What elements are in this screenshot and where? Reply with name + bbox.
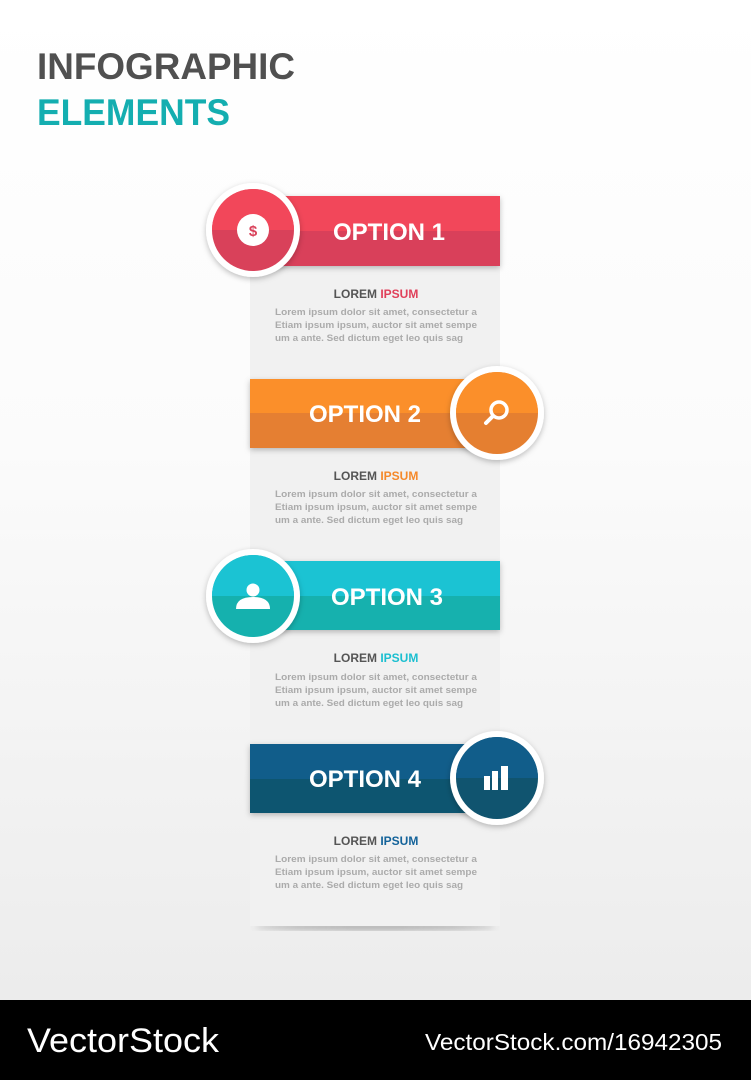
option 4: OPTION 4 bbox=[309, 766, 422, 793]
option 1 bbox=[206, 183, 500, 343]
option 2: OPTION 2 bbox=[309, 401, 421, 428]
text block 1: um a ante. Sed dictum eget leo quis sag bbox=[275, 333, 463, 343]
title bbox=[37, 46, 295, 133]
text block 2: Lorem ipsum dolor sit amet, consectetur a bbox=[275, 489, 478, 499]
option 3: OPTION 3 bbox=[331, 584, 443, 611]
panel: column background bbox=[250, 196, 500, 930]
text block 4: um a ante. Sed dictum eget leo quis sag bbox=[275, 880, 463, 890]
title: INFOGRAPHIC bbox=[37, 46, 295, 87]
text block 3: LOREM IPSUM bbox=[334, 651, 418, 665]
footer: VectorStock bbox=[27, 1022, 220, 1060]
text block 2: Etiam ipsum ipsum, auctor sit amet sempe bbox=[275, 502, 477, 512]
title: ELEMENTS bbox=[37, 92, 230, 133]
option 4 bbox=[250, 731, 544, 890]
icon: bar chart bbox=[450, 731, 544, 825]
icon: magnifier bbox=[450, 366, 544, 460]
text block 2: um a ante. Sed dictum eget leo quis sag bbox=[275, 515, 463, 525]
text block 4: Etiam ipsum ipsum, auctor sit amet sempe bbox=[275, 867, 477, 877]
text block 1: Etiam ipsum ipsum, auctor sit amet sempe bbox=[275, 320, 477, 330]
text block 2 bbox=[275, 469, 478, 525]
text block 1 bbox=[275, 287, 478, 343]
option 3 bbox=[206, 549, 500, 708]
text block 3: um a ante. Sed dictum eget leo quis sag bbox=[275, 698, 463, 708]
text block 3 bbox=[275, 651, 478, 708]
text block 1: LOREM IPSUM bbox=[334, 287, 418, 301]
text block 4: Lorem ipsum dolor sit amet, consectetur a bbox=[275, 854, 478, 864]
text block 3: Etiam ipsum ipsum, auctor sit amet sempe bbox=[275, 685, 477, 695]
text block 3: Lorem ipsum dolor sit amet, consectetur a bbox=[275, 672, 478, 682]
icon: person bbox=[206, 549, 300, 643]
footer bbox=[0, 1000, 751, 1080]
option 1: OPTION 1 bbox=[333, 219, 445, 246]
text block 2: LOREM IPSUM bbox=[334, 469, 418, 483]
text block 4: LOREM IPSUM bbox=[334, 834, 418, 848]
icon: dollar bbox=[206, 183, 300, 277]
option 1: $ bbox=[249, 223, 258, 240]
footer: VectorStock.com/16942305 bbox=[425, 1029, 722, 1055]
text block 4 bbox=[275, 834, 478, 890]
text block 1: Lorem ipsum dolor sit amet, consectetur a bbox=[275, 307, 478, 317]
option 2 bbox=[250, 366, 544, 525]
